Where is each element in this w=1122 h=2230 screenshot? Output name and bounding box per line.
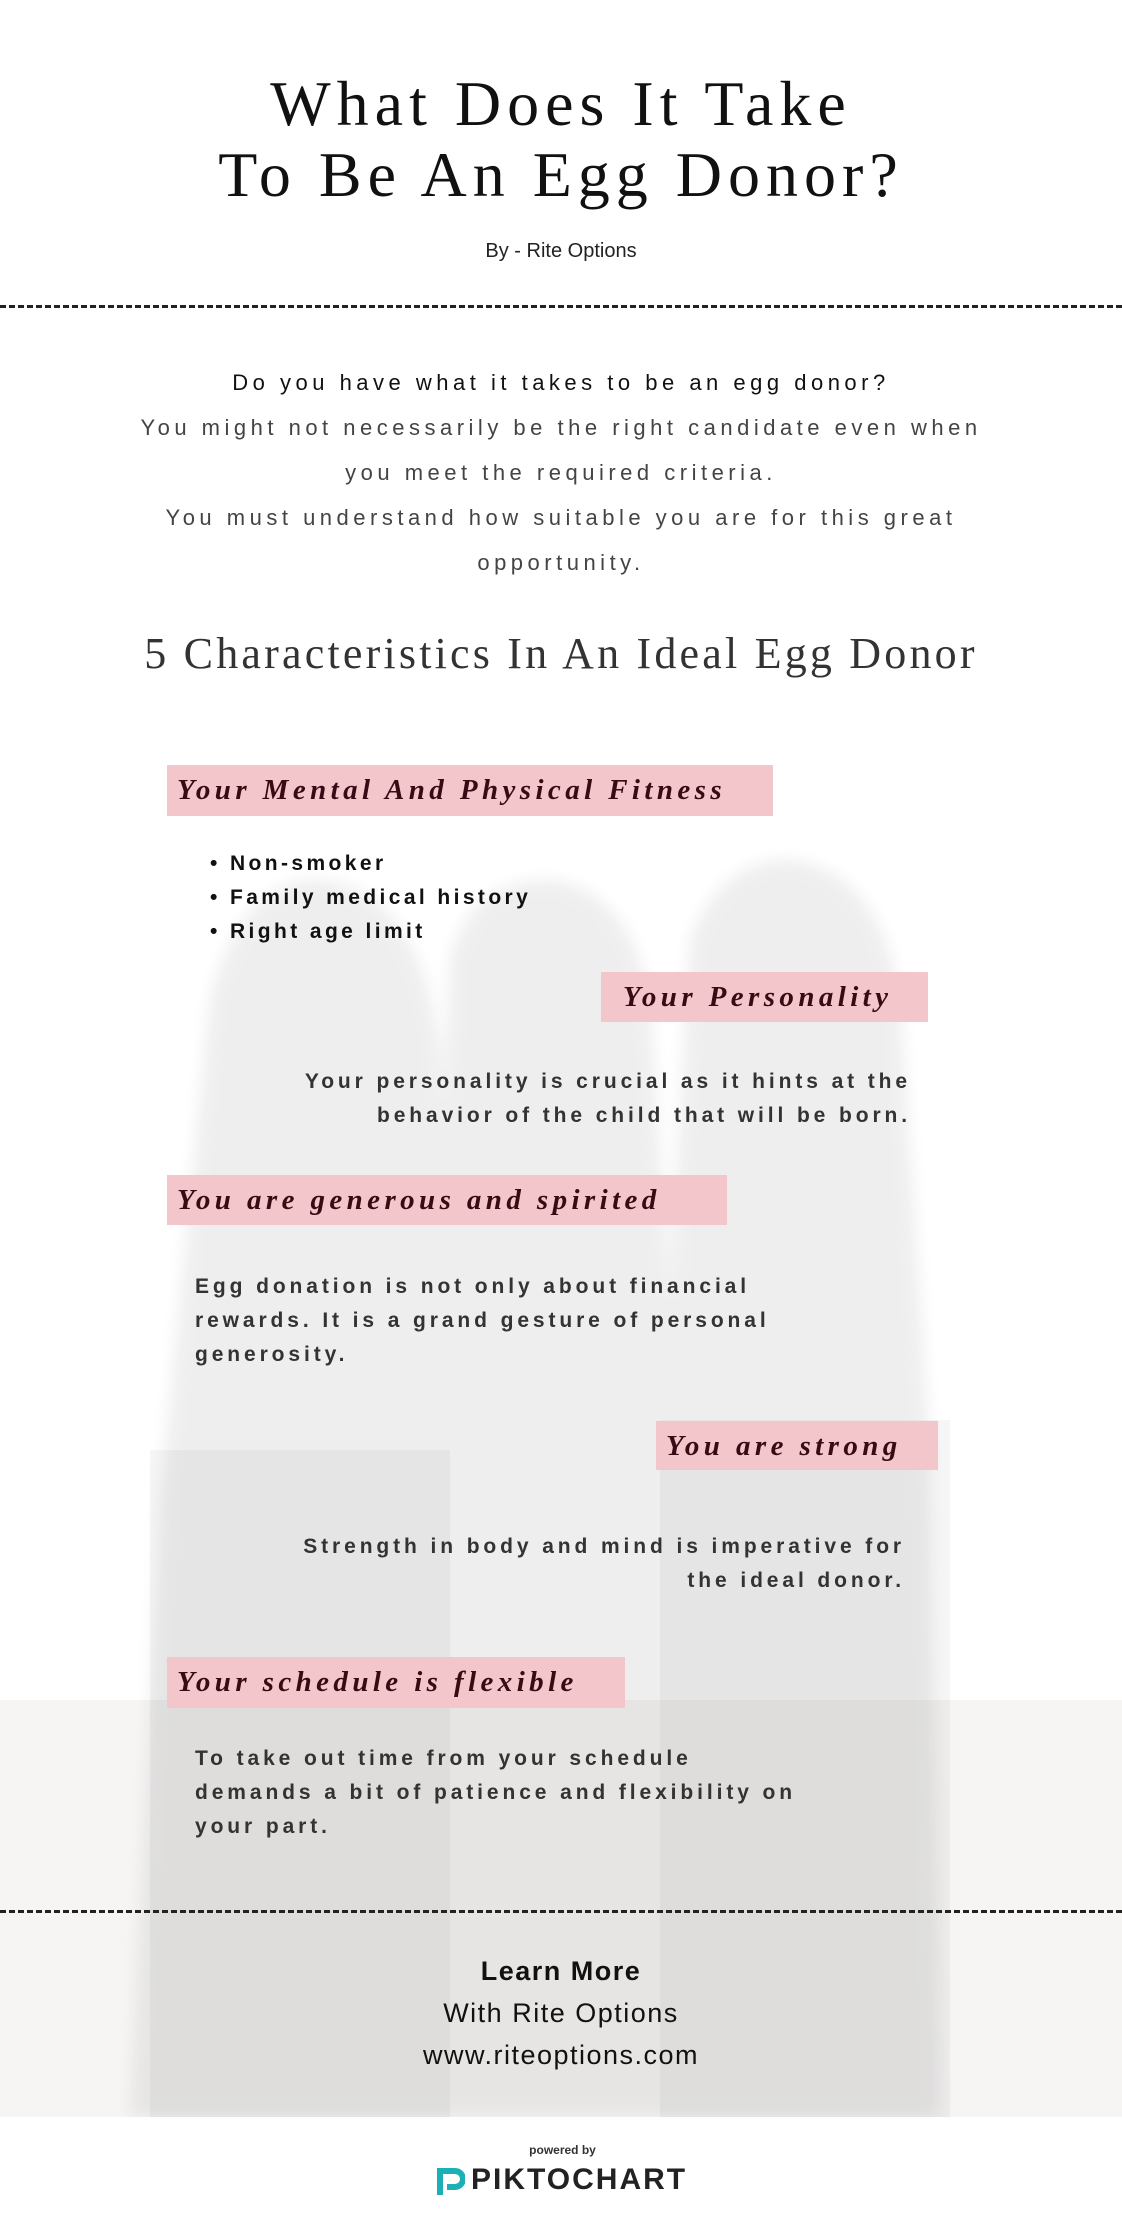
heading: strong: You are strong (666, 1430, 902, 1462)
strong text: Strength in body and mind is imperative for (303, 1535, 905, 1558)
footer call to action: www.riteoptions.com (423, 2040, 699, 2070)
heading: mental and physical fitness (167, 765, 773, 816)
title (218, 68, 904, 210)
byline: By - Rite Options (485, 240, 637, 262)
generous text: generosity. (195, 1343, 348, 1366)
schedule text: demands a bit of patience and flexibility on (195, 1781, 796, 1804)
bullet list: • Family medical history (210, 886, 531, 909)
piktochart logo: PIKTOCHART (471, 2163, 687, 2196)
intro text: Do you have what it takes to be an egg donor? (232, 370, 890, 395)
strong text: the ideal donor. (687, 1569, 905, 1592)
intro text (140, 370, 982, 575)
piktochart logo (437, 2143, 687, 2196)
personality text: behavior of the child that will be born. (377, 1104, 911, 1127)
bullet list: • Right age limit (210, 920, 426, 943)
piktochart logo: powered by (529, 2143, 596, 2157)
intro text: You must understand how suitable you are for this great (166, 505, 956, 530)
personality text: Your personality is crucial as it hints at the (305, 1070, 911, 1093)
footer call to action (423, 1956, 699, 2070)
generous text (195, 1275, 770, 1366)
heading: mental and physical fitness: Your Mental And Physical Fitness (177, 774, 726, 806)
bullet list: • Non-smoker (210, 852, 387, 875)
intro text: You might not necessarily be the right candidate even when (140, 415, 982, 440)
title: What Does It Take (270, 68, 852, 139)
personality text (305, 1070, 911, 1127)
bullet list (210, 852, 531, 943)
heading: schedule (167, 1657, 625, 1708)
heading: schedule: Your schedule is flexible (177, 1666, 578, 1698)
schedule text: To take out time from your schedule (195, 1747, 692, 1770)
heading: strong (656, 1421, 938, 1470)
intro text: you meet the required criteria. (345, 460, 777, 485)
generous text: rewards. It is a grand gesture of personal (195, 1309, 770, 1332)
title: To Be An Egg Donor? (218, 139, 904, 210)
heading: personality (601, 972, 928, 1022)
intro text: opportunity. (477, 550, 645, 575)
schedule text: your part. (195, 1815, 331, 1838)
generous text: Egg donation is not only about financial (195, 1275, 750, 1298)
strong text (303, 1535, 905, 1592)
heading: generous: You are generous and spirited (177, 1184, 661, 1216)
heading: generous (167, 1175, 727, 1225)
heading: personality: Your Personality (623, 981, 892, 1013)
footer call to action: Learn More (481, 1956, 641, 1986)
footer call to action: With Rite Options (443, 1998, 679, 2028)
schedule text (195, 1747, 796, 1838)
section heading: 5 Characteristics In An Ideal Egg Donor (144, 629, 978, 678)
